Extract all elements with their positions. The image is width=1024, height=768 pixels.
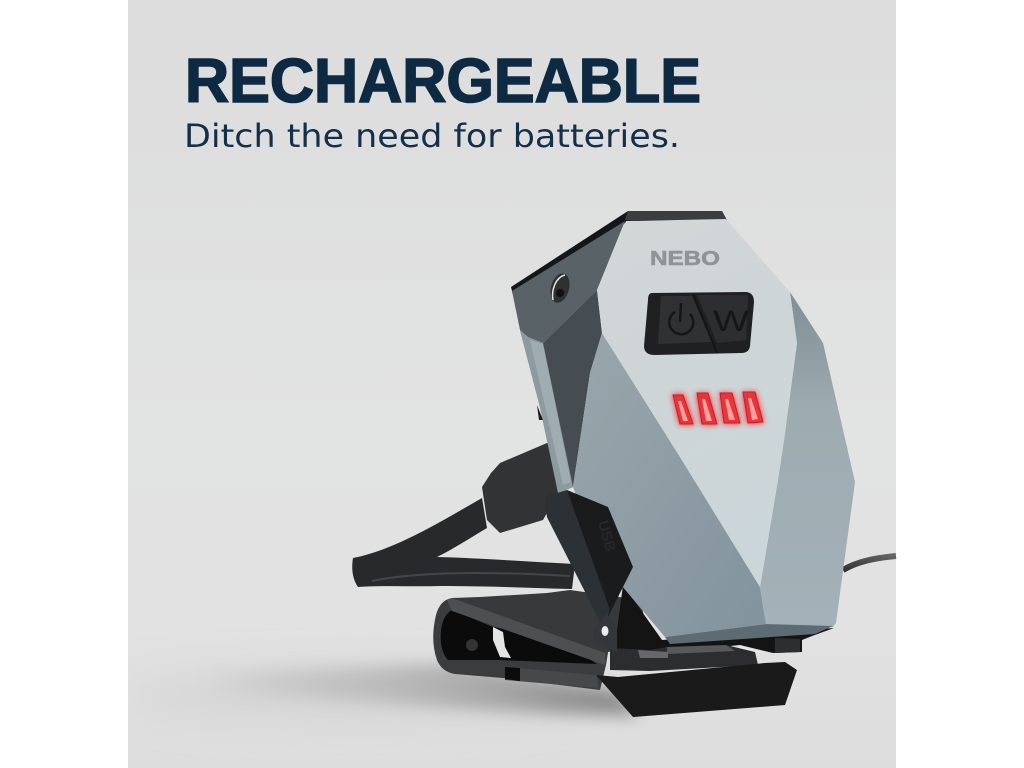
mounting hole — [547, 271, 573, 305]
under-body — [610, 585, 834, 655]
NEBO logo: NEBO — [650, 248, 720, 270]
left strip — [520, 330, 573, 493]
light slit — [493, 627, 511, 658]
subtitle: Ditch the need for batteries. — [184, 117, 680, 155]
bottom edge — [665, 624, 833, 644]
clip plate — [452, 590, 650, 653]
product photo: rechargeable headlamp — [352, 211, 896, 717]
lower left facet — [573, 333, 766, 637]
clip loop — [433, 598, 610, 690]
battery level LEDs — [672, 392, 764, 425]
hinge pin — [593, 613, 617, 652]
right facet — [760, 292, 855, 627]
title: RECHARGEABLE — [185, 47, 701, 116]
background panel — [128, 0, 896, 768]
infographic canvas — [128, 0, 896, 768]
clip base — [433, 585, 834, 717]
clip interior — [441, 610, 597, 664]
USB label: USB — [594, 519, 619, 554]
centre face — [597, 219, 797, 587]
control buttons — [644, 292, 754, 355]
top edge — [511, 211, 727, 295]
mount plates — [610, 645, 758, 671]
dark side panel — [512, 221, 625, 343]
device body — [511, 211, 855, 644]
right foot — [775, 638, 800, 653]
W icon: W — [713, 305, 750, 338]
power icon — [669, 303, 693, 334]
USB flap — [545, 490, 633, 652]
base pad — [596, 662, 797, 717]
black side tab — [537, 405, 543, 420]
charging cable — [352, 498, 896, 589]
usb connector — [482, 443, 574, 533]
light gap — [738, 645, 762, 654]
lower strip — [505, 667, 598, 688]
